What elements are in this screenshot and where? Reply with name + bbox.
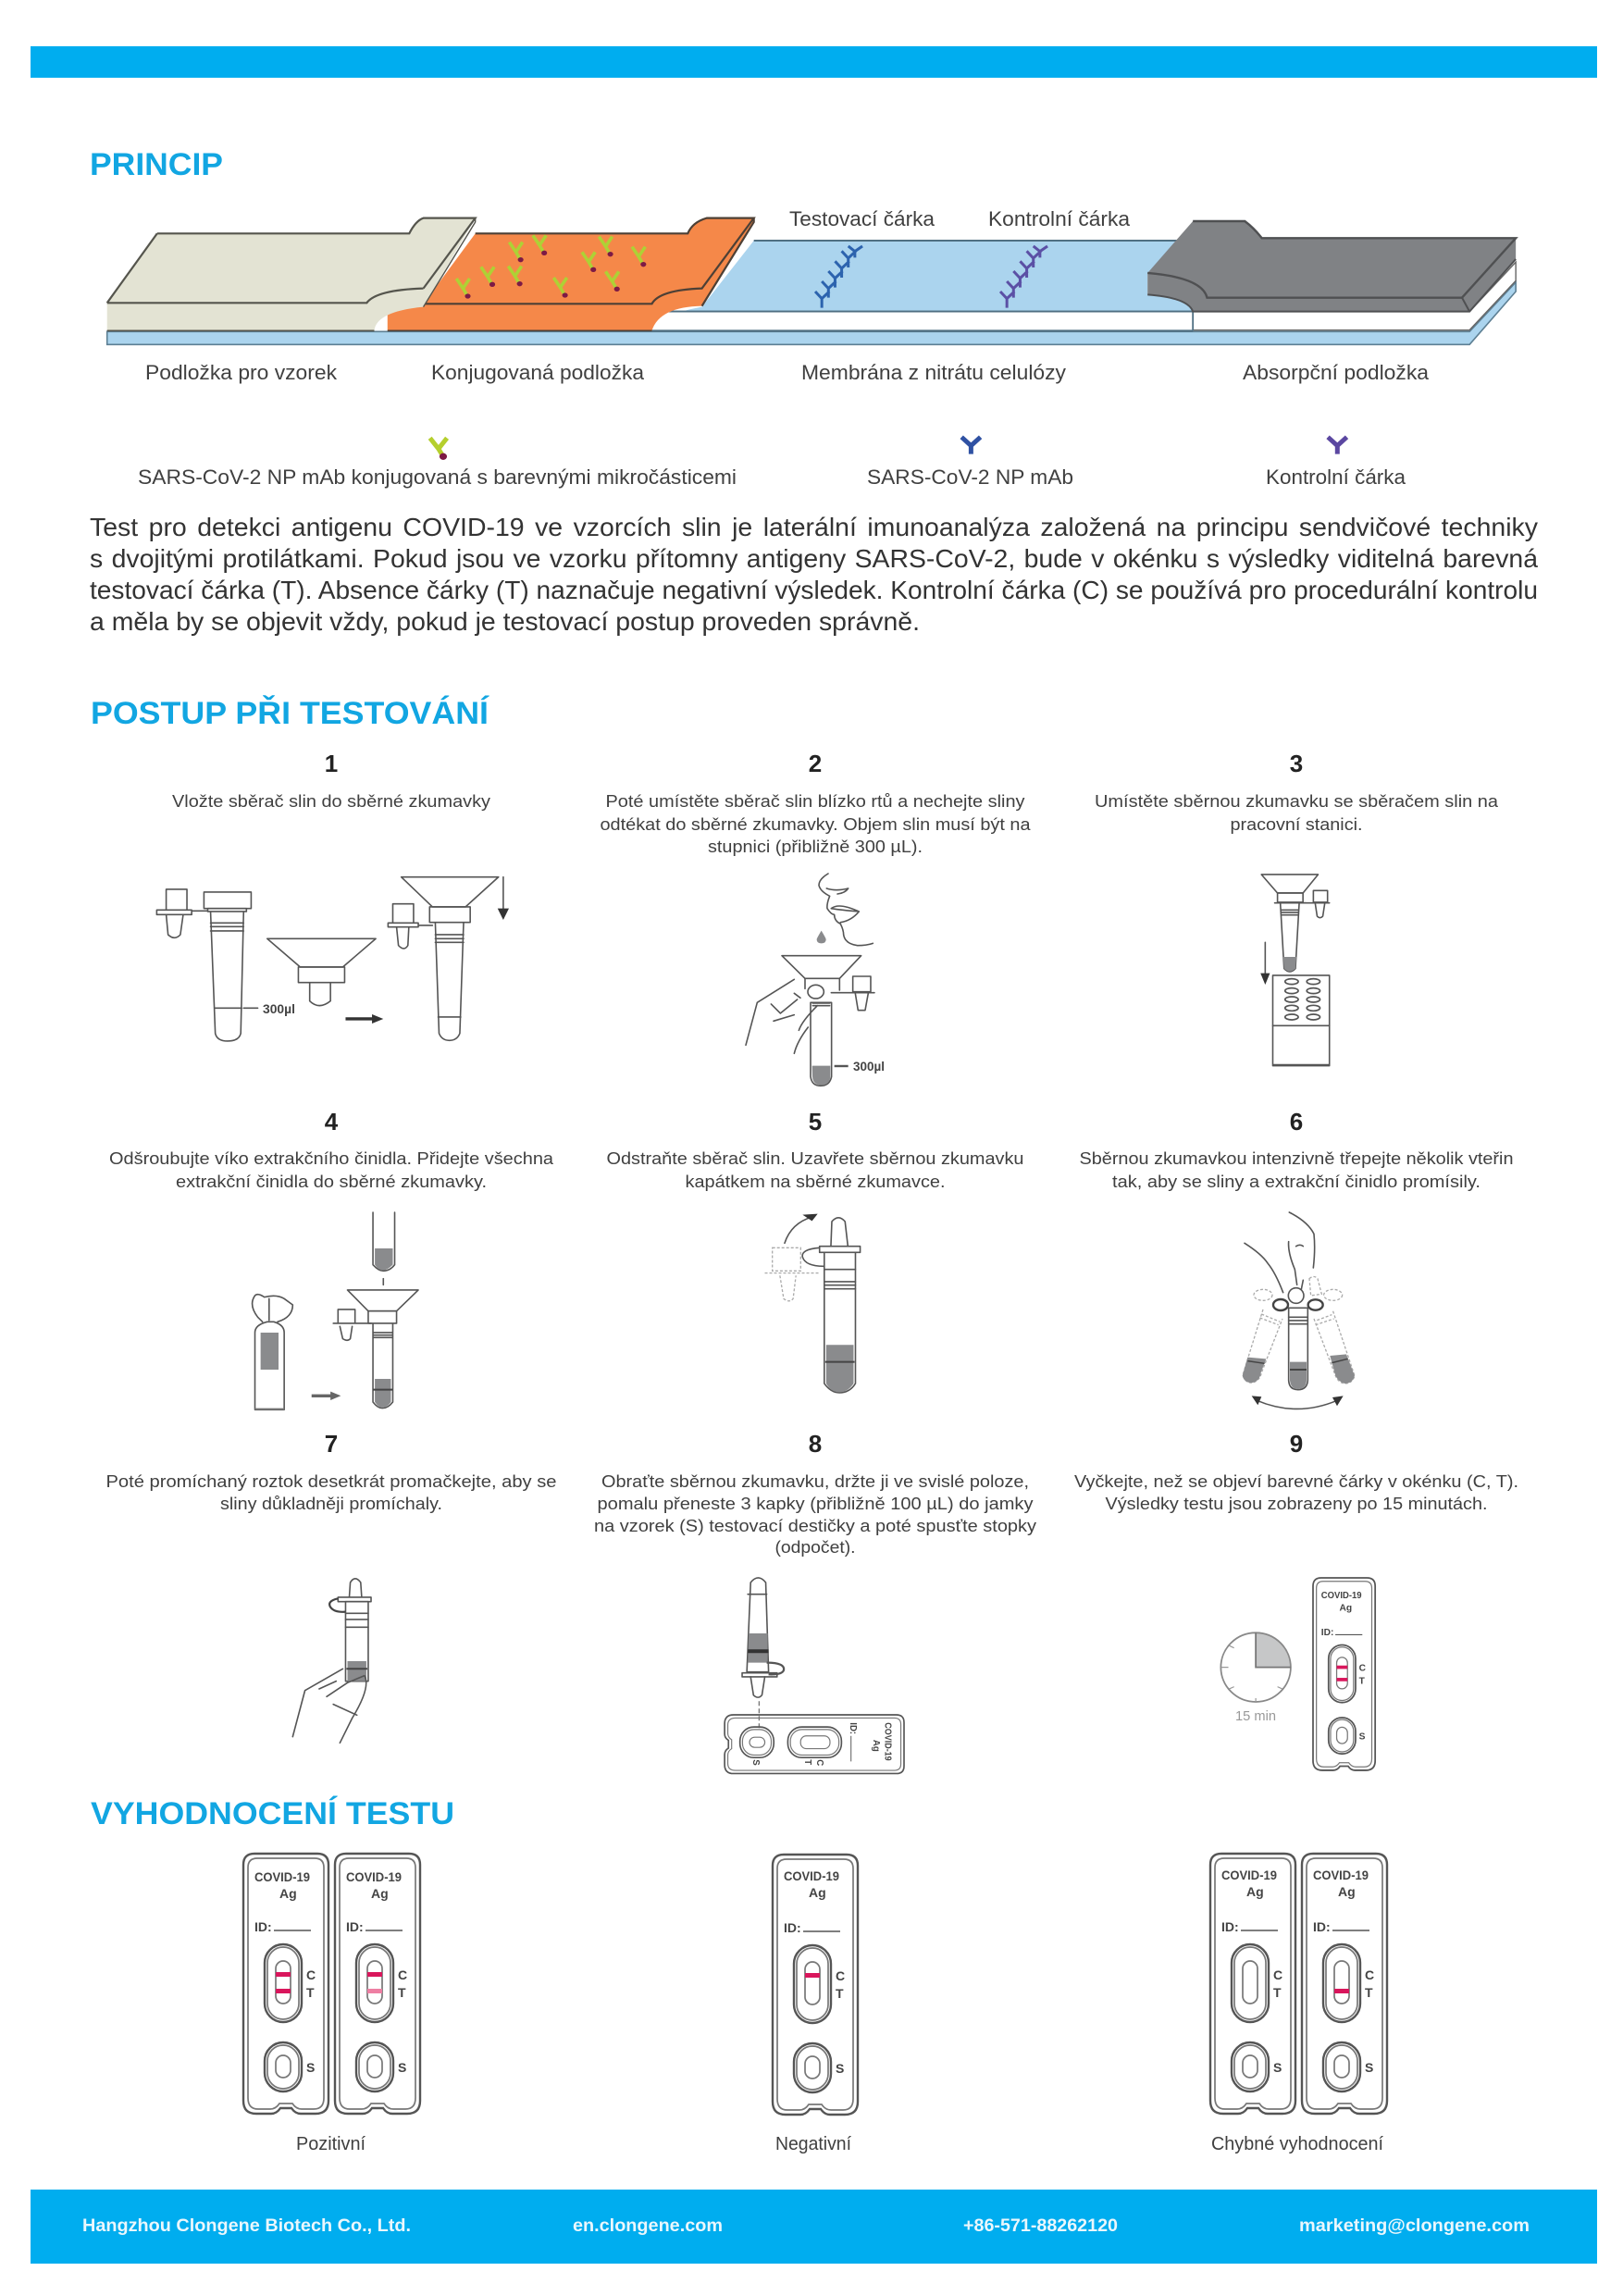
icon: saliva collection xyxy=(746,874,874,1086)
step 6: Sběrnou zkumavkou intenzivně třepejte několik vteřin xyxy=(1079,1148,1514,1168)
icon: inverted dropper xyxy=(742,1578,784,1729)
step 3: Umístěte sběrnou zkumavku se sběračem slin na xyxy=(1095,791,1499,811)
cassette: positive strong xyxy=(243,1854,328,2114)
icon: horizontal test cassette: COVID-19 xyxy=(882,1722,892,1761)
icon: add extraction reagent xyxy=(253,1212,418,1409)
panel: invalid xyxy=(1210,1854,1387,2154)
panel: positive xyxy=(243,1854,420,2154)
icon: horizontal test cassette: S xyxy=(750,1759,761,1766)
legend text: NP antibody: SARS-CoV-2 NP mAb xyxy=(867,465,1073,489)
legend text: control line: Kontrolní čárka xyxy=(1266,465,1406,489)
icon: squeeze tube xyxy=(292,1579,371,1743)
step 1 xyxy=(156,750,509,1041)
icon: result cassette xyxy=(1313,1578,1375,1770)
legend text: conjugated antibody: SARS-CoV-2 NP mAb konjugovaná s barevnými mikročásticemi xyxy=(138,465,737,489)
icon: 15 minute clock xyxy=(1220,1632,1291,1702)
cassette: negative: S xyxy=(836,2061,844,2076)
step 5: kapátkem na sběrné zkumavce. xyxy=(685,1172,946,1191)
step 3 xyxy=(1095,750,1499,1066)
step 3: 3 xyxy=(1290,750,1303,777)
principle paragraph xyxy=(90,513,1538,636)
icon: result cassette: COVID-19 xyxy=(1321,1591,1362,1601)
cassette: invalid test line only: T xyxy=(1365,1985,1373,2000)
icon: close tube with dropper xyxy=(765,1214,861,1393)
diagram: lateral flow strip xyxy=(107,218,1516,460)
cassette: positive weak: Ag xyxy=(371,1886,389,1901)
label: conjugate pad: Konjugovaná podložka xyxy=(431,361,645,384)
footer banner: Hangzhou Clongene Biotech Co., Ltd. xyxy=(82,2216,411,2236)
step 3: pracovní stanici. xyxy=(1231,814,1362,834)
step 8: (odpočet). xyxy=(775,1537,855,1557)
icon: result cassette: ID: xyxy=(1321,1628,1333,1638)
icon: step 1 tube and funnel xyxy=(156,877,509,1041)
conjugate pad xyxy=(388,218,754,330)
cassette: invalid no lines: T xyxy=(1273,1985,1282,2000)
heading: result evaluation: VYHODNOCENÍ TESTU xyxy=(91,1796,454,1831)
cassette: invalid test line only: S xyxy=(1365,2060,1373,2075)
heading: test procedure: POSTUP PŘI TESTOVÁNÍ xyxy=(91,696,490,731)
icon: tube in workstation xyxy=(1260,875,1330,1066)
legend icon: conjugated antibody xyxy=(430,438,447,460)
step 1: 1 xyxy=(325,750,338,777)
step 7 xyxy=(105,1430,557,1743)
test line antibodies xyxy=(815,246,862,308)
step 5 xyxy=(607,1108,1023,1393)
step 7: Poté promíchaný roztok desetkrát promačkejte, aby se xyxy=(105,1471,557,1491)
cassette: invalid no lines: COVID-19 xyxy=(1221,1868,1277,1882)
conjugated antibodies xyxy=(456,235,646,299)
step 8 xyxy=(594,1430,1037,1773)
cassette: invalid test line only xyxy=(1302,1854,1387,2114)
icon: horizontal test cassette: ID: xyxy=(848,1722,858,1734)
cassette: negative: COVID-19 xyxy=(784,1868,839,1883)
cassette: negative: Ag xyxy=(809,1885,826,1900)
step 7: sliny důkladněji promíchaly. xyxy=(220,1494,442,1513)
step 9: 9 xyxy=(1290,1430,1303,1458)
top banner xyxy=(31,46,1597,78)
cassette: positive strong: S xyxy=(306,2060,315,2075)
cassette: invalid test line only: C xyxy=(1365,1967,1374,1982)
icon: result cassette: C xyxy=(1359,1664,1367,1674)
cassette: negative xyxy=(773,1855,858,2115)
footer banner xyxy=(31,2190,1597,2264)
step 2: Poté umístěte sběrač slin blízko rtů a nechejte sliny xyxy=(605,791,1025,811)
footer banner: marketing@clongene.com xyxy=(1299,2216,1530,2236)
step 4: 4 xyxy=(325,1108,339,1136)
footer banner: en.clongene.com xyxy=(573,2216,723,2236)
step 2 xyxy=(600,750,1031,1086)
cassette: invalid no lines: S xyxy=(1273,2060,1282,2075)
cassette: negative: T xyxy=(836,1986,844,2001)
cassette: invalid no lines xyxy=(1210,1854,1295,2114)
cassette: positive strong: T xyxy=(306,1985,315,2000)
cassette: positive weak: COVID-19 xyxy=(346,1869,402,1884)
legend icon: control line antibody xyxy=(1328,437,1346,454)
step 2: 2 xyxy=(809,750,822,777)
cassette: invalid no lines: C xyxy=(1273,1967,1282,1982)
icon: horizontal test cassette: T xyxy=(802,1759,812,1765)
step 9 xyxy=(1074,1430,1518,1770)
cassette: positive strong: COVID-19 xyxy=(254,1869,310,1884)
cassette: negative: ID: xyxy=(784,1920,801,1935)
cassette: positive weak: C xyxy=(398,1967,407,1982)
icon: horizontal test cassette xyxy=(725,1715,904,1773)
step 6: tak, aby se sliny a extrakční činidlo promísily. xyxy=(1112,1172,1481,1191)
cassette: invalid test line only: Ag xyxy=(1338,1884,1356,1899)
sample pad xyxy=(107,218,476,330)
label: 300 microlitres: 300µl xyxy=(263,1001,295,1016)
label: absorbent pad: Absorpční podložka xyxy=(1243,361,1430,384)
step 8: pomalu přeneste 3 kapky (přibližně 100 µL) do jamky xyxy=(598,1494,1034,1513)
cassette: positive weak: S xyxy=(398,2060,406,2075)
control line antibodies xyxy=(1000,246,1047,308)
step 4: extrakční činidla do sběrné zkumavky. xyxy=(176,1172,487,1191)
label: negative: Negativní xyxy=(775,2134,851,2154)
heading: princip: PRINCIP xyxy=(90,147,223,182)
step 5: 5 xyxy=(809,1108,822,1136)
step 8: na vzorek (S) testovací destičky a poté spusťte stopky xyxy=(594,1516,1037,1535)
step 9: Vyčkejte, než se objeví barevné čárky v okénku (C, T). xyxy=(1074,1471,1518,1491)
label: 300 microlitres: 300µl xyxy=(853,1059,885,1074)
label: membrane: Membrána z nitrátu celulózy xyxy=(801,361,1066,384)
label: sample pad: Podložka pro vzorek xyxy=(145,361,338,384)
step 8: 8 xyxy=(809,1430,822,1458)
cassette: positive weak: T xyxy=(398,1985,406,2000)
principle paragraph: a měla by se objevit vždy, pokud je testovací postup proveden správně. xyxy=(90,607,920,636)
white layer xyxy=(651,262,1516,330)
membrane xyxy=(651,241,1193,330)
principle paragraph: testovací čárka (T). Absence čárky (T) naznačuje negativní výsledek. Kontrolní čárka (C) se používá pro procedurální kontrolu xyxy=(90,576,1538,604)
step 2: stupnici (přibližně 300 µL). xyxy=(708,837,923,856)
label: control line: Kontrolní čárka xyxy=(988,207,1131,230)
cassette: positive strong: Ag xyxy=(279,1886,297,1901)
legend icon: NP antibody xyxy=(961,437,981,454)
cassette: positive strong: ID: xyxy=(254,1919,272,1934)
cassette: invalid no lines: ID: xyxy=(1221,1919,1239,1934)
footer banner: +86-571-88262120 xyxy=(963,2216,1118,2236)
principle paragraph: Test pro detekci antigenu COVID-19 ve vzorcích slin je laterální imunoanalýza založená na principu sendvičové techniky xyxy=(90,513,1538,541)
label: positive: Pozitivní xyxy=(296,2134,365,2154)
icon: result cassette: S xyxy=(1359,1732,1366,1743)
cassette: invalid no lines: Ag xyxy=(1246,1884,1264,1899)
label: 15 min: 15 min xyxy=(1235,1708,1276,1724)
absorbent pad xyxy=(1147,221,1516,312)
cassette: invalid test line only: ID: xyxy=(1313,1919,1331,1934)
label: test line: Testovací čárka xyxy=(789,207,935,230)
panel: negative xyxy=(773,1855,858,2154)
cassette: negative: C xyxy=(836,1968,845,1983)
step 4: Odšroubujte víko extrakčního činidla. Přidejte všechna xyxy=(109,1148,554,1168)
icon: horizontal test cassette: C xyxy=(814,1759,824,1766)
icon: result cassette: Ag xyxy=(1339,1603,1352,1614)
icon: shaking tube xyxy=(1243,1212,1355,1409)
icon: result cassette: T xyxy=(1359,1677,1366,1687)
icon: horizontal test cassette: Ag xyxy=(871,1740,881,1752)
step 1: Vložte sběrač slin do sběrné zkumavky xyxy=(172,791,491,811)
step 6: 6 xyxy=(1290,1108,1303,1136)
label: invalid: Chybné vyhodnocení xyxy=(1211,2134,1383,2154)
step 6 xyxy=(1079,1108,1514,1409)
step 8: Obraťte sběrnou zkumavku, držte ji ve svislé poloze, xyxy=(601,1471,1029,1491)
step 5: Odstraňte sběrač slin. Uzavřete sběrnou zkumavku xyxy=(607,1148,1023,1168)
step 9: Výsledky testu jsou zobrazeny po 15 minutách. xyxy=(1105,1494,1488,1513)
step 7: 7 xyxy=(325,1430,338,1458)
step 4 xyxy=(109,1108,554,1409)
cassette: invalid test line only: COVID-19 xyxy=(1313,1868,1369,1882)
cassette: positive weak: ID: xyxy=(346,1919,364,1934)
principle paragraph: s dvojitými protilátkami. Pokud jsou ve vzorku přítomny antigeny SARS-CoV-2, bude v okénku s výsledky viditelná barevná xyxy=(90,544,1538,573)
step 2: odtékat do sběrné zkumavky. Objem slin musí být na xyxy=(600,814,1031,834)
backing layer xyxy=(107,282,1516,344)
membrane edges xyxy=(651,241,1193,330)
cassette: positive strong: C xyxy=(306,1967,316,1982)
cassette: positive weak xyxy=(335,1854,420,2114)
